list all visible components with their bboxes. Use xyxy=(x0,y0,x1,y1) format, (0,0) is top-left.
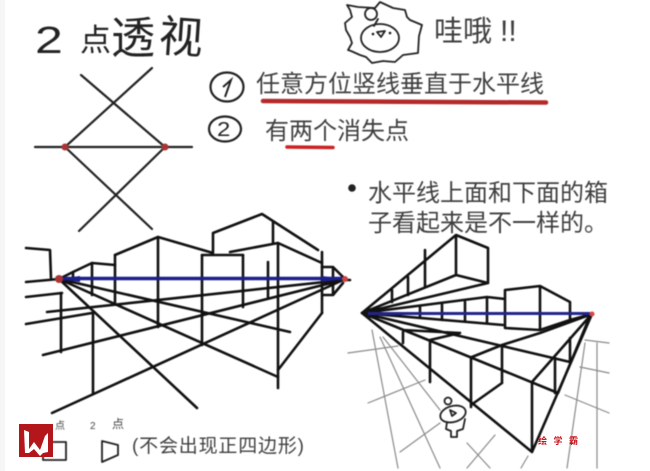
title: 视 xyxy=(157,12,205,64)
exclamation text: !! xyxy=(500,15,517,48)
title: 2 xyxy=(35,20,63,62)
upper box xyxy=(362,235,488,313)
small square and trapezoid sketches xyxy=(43,417,124,462)
cartoon character xyxy=(438,398,468,437)
rule 2: 2 xyxy=(217,118,230,141)
floor grid xyxy=(348,330,609,468)
horizon: blue line xyxy=(368,312,590,315)
caption: no true squares appear: (不会出现正四边形) xyxy=(132,435,304,457)
exclamation text xyxy=(434,15,517,48)
rule 2 xyxy=(209,116,409,148)
note about boxes above and below the horizon xyxy=(348,180,608,237)
small square and trapezoid sketches: 点 xyxy=(112,417,124,431)
horizon: blue line xyxy=(62,277,342,280)
rule 1: 任意方位竖线垂直于水平线 xyxy=(256,71,544,98)
diagram: boxes above and below horizon xyxy=(348,235,609,468)
diagram: city of boxes with two vanishing points xyxy=(26,214,350,413)
title: 透 xyxy=(111,14,155,63)
title xyxy=(35,12,205,64)
small square and trapezoid sketches: 点 xyxy=(55,420,65,432)
note about boxes above and below the horizon: 水平线上面和下面的箱 xyxy=(368,180,608,207)
lower large box xyxy=(362,313,592,452)
diagram: horizon line with two vanishing points xyxy=(35,68,192,231)
middle boxes xyxy=(362,286,592,330)
small square and trapezoid sketches: 2 xyxy=(90,421,96,432)
icon: surprised character burst xyxy=(345,2,422,63)
note about boxes above and below the horizon: 子看起来是不一样的。 xyxy=(368,210,608,237)
exclamation text: 哇哦 xyxy=(434,15,492,48)
logo xyxy=(19,424,53,457)
watermark text: 绘 学 霸 xyxy=(538,435,578,446)
title: 点 xyxy=(80,23,111,58)
rule 2: 有两个消失点 xyxy=(265,118,409,145)
